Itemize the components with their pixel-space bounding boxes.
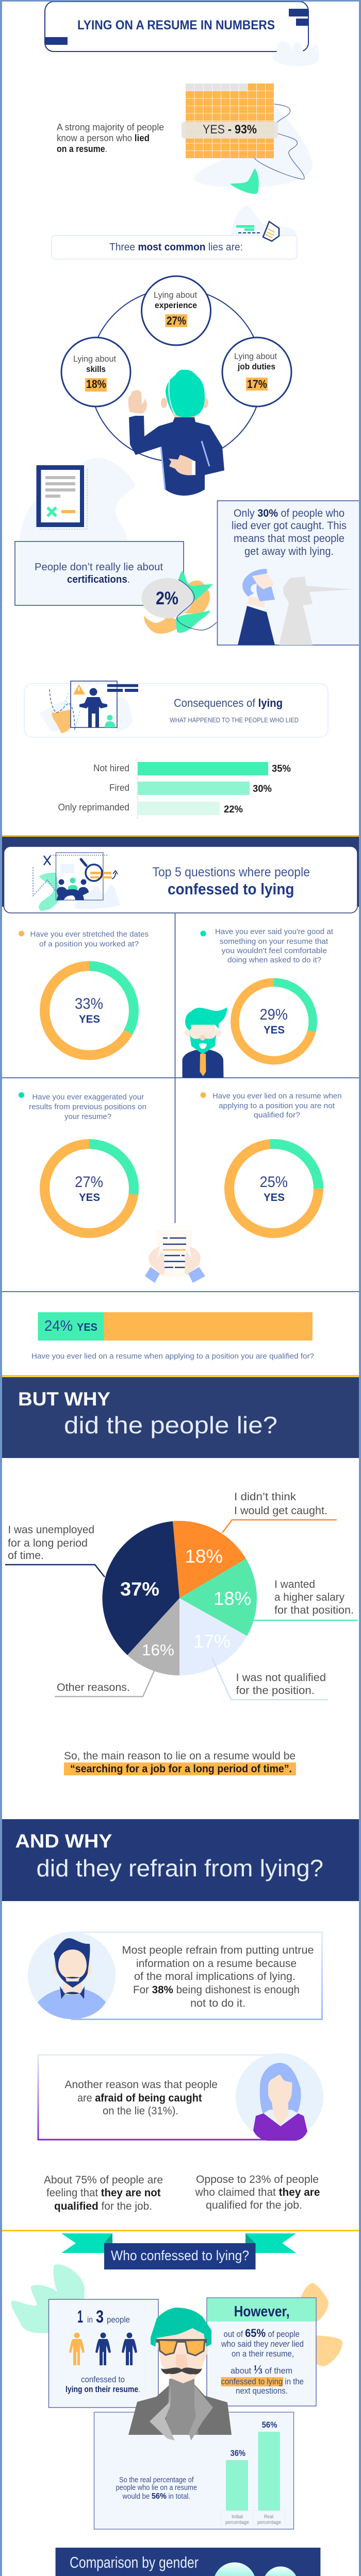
donut chart: 33 percent: 33% — [75, 995, 103, 1012]
panel: question 3 — [19, 1092, 146, 1233]
decorative blobs — [11, 2264, 342, 2366]
card: consequences of lying: Consequences of lying — [174, 697, 283, 709]
panel: question 1 — [19, 930, 149, 1055]
panel: real percentage: would be 56% in total. — [122, 2492, 190, 2501]
circle: skills: Lying about — [73, 354, 116, 364]
panel: afraid of being caught: are afraid of being caught — [77, 2092, 202, 2104]
panel: however — [207, 2298, 316, 2406]
section band: top 5 questions: confessed to lying — [168, 880, 294, 898]
pie chart: reasons to lie: 18% — [185, 1546, 223, 1567]
bar: only reprimanded: 22% — [224, 804, 243, 815]
panel: question 3: Have you ever exaggerated your — [32, 1093, 144, 1101]
panel: question 4: Have you ever lied on a resume when — [212, 1092, 341, 1100]
circle: job duties: 17% — [247, 378, 267, 391]
waffle chart: 93 percent yes: YES - 93% — [203, 123, 257, 137]
title: LYING ON A RESUME IN NUMBERS — [77, 18, 275, 32]
donut chart: 27 percent: YES — [79, 1192, 100, 1204]
icon: person navy — [122, 2333, 137, 2365]
illustration: man crossing fingers behind back — [128, 369, 224, 496]
panel: question 4: applying to a position you are not — [219, 1101, 335, 1110]
panel: real percentage: people who lie on a resume — [116, 2484, 197, 2492]
pie chart: reasons to lie: 17% — [193, 1631, 231, 1652]
section band: but why did the people lie — [2, 1375, 359, 1458]
section band: and why did they refrain: AND WHY — [15, 1831, 112, 1852]
text: not qualified 75 percent — [44, 2174, 163, 2212]
donut chart: 25 percent: YES — [264, 1192, 285, 1204]
grid dividers — [2, 913, 359, 1292]
label: didn't think I would get caught: I would get caught. — [234, 1505, 327, 1517]
panel: however: on a their resume, — [232, 2349, 294, 2359]
pie chart: reasons to lie — [5, 1491, 358, 1700]
donut chart: 27 percent: 27% — [75, 1174, 103, 1191]
panel: question 1: of a position you worked at? — [39, 940, 139, 948]
panel: question 2: you wouldn't feel comfortable — [222, 946, 327, 955]
bar: not hired: Not hired — [93, 763, 129, 773]
donut chart: 25 percent — [229, 1144, 319, 1233]
circle: experience: experience — [155, 300, 197, 310]
text: qualified 23 percent: qualified for the job. — [206, 2199, 302, 2211]
panel: however: confessed to lying in the — [221, 2377, 304, 2386]
illustration: consequences — [39, 681, 138, 733]
bar: fired: 30% — [253, 784, 272, 794]
panel: 1 in 3 people: confessed to — [81, 2375, 125, 2384]
circle: job duties: job duties — [237, 362, 275, 371]
pie chart: reasons to lie: 16% — [142, 1641, 174, 1659]
icon: person orange — [69, 2333, 85, 2365]
panel: question 4: qualified for? — [254, 1111, 300, 1120]
label: didn't think I would get caught: I didn’t think — [234, 1491, 297, 1503]
text: qualified 23 percent — [195, 2174, 320, 2211]
panel: 1 in 3 people: 1 — [77, 2307, 83, 2327]
avatar: woman — [236, 2053, 323, 2141]
icon: hands holding resume — [145, 1230, 205, 1283]
circle: experience: Lying about — [154, 290, 197, 300]
label: other reasons — [55, 1671, 154, 1697]
donut chart: 25 percent: 25% — [260, 1174, 288, 1191]
text: not qualified 75 percent: qualified for the job. — [54, 2200, 152, 2212]
illustration: man and long-nosed shadow — [238, 569, 353, 645]
circle: job duties — [222, 337, 291, 406]
panel: gender: Comparison by gender — [70, 2553, 199, 2571]
panel: 1 in 3 people: in — [87, 2315, 93, 2325]
panel: question 2 — [183, 927, 334, 1078]
panel: moral implications: not to do it. — [190, 1997, 245, 2009]
donut chart: 29 percent — [235, 982, 313, 1060]
donut chart: 29 percent: 29% — [260, 1006, 288, 1023]
circle: skills — [61, 337, 130, 406]
text: strong majority: A strong majority of people — [57, 122, 164, 132]
panel: moral implications: Most people refrain from putting untrue — [122, 1944, 314, 1956]
label: higher salary: for that position. — [274, 1604, 354, 1616]
donut chart: 27 percent — [44, 1144, 134, 1233]
text: main reason: So, the main reason to lie on a resume would be — [64, 1750, 296, 1762]
circle: job duties: Lying about — [234, 351, 277, 361]
bar: fired — [109, 782, 272, 795]
panel: moral implications — [28, 1932, 322, 2020]
section band: but why did the people lie: BUT WHY — [18, 1388, 110, 1410]
card: three most common lies: Three most common lies are: — [109, 242, 243, 253]
bar: not hired: 35% — [272, 764, 291, 774]
bar chart: initial vs real: percentage — [257, 2519, 281, 2526]
donut chart: 29 percent: YES — [264, 1024, 285, 1036]
panel: comparison by gender and age — [56, 2548, 320, 2576]
panel: question 3: your resume? — [64, 1112, 111, 1121]
label: unemployed — [5, 1524, 105, 1577]
panel: moral implications: of the moral implications of lying. — [134, 1971, 296, 1982]
bar chart: initial vs real: 36% — [230, 2448, 245, 2458]
panel: 1 in 3 people: people — [107, 2315, 130, 2325]
panel: only 30 percent got caught: means that most people — [234, 533, 344, 545]
label: not qualified — [212, 1657, 328, 1700]
panel: certifications — [15, 541, 217, 634]
bar chart: initial vs real: 56% — [262, 2420, 277, 2430]
panel: question 3: results from previous positions on — [29, 1103, 146, 1111]
badge: 2 percent — [141, 571, 217, 634]
progress bar: 24 percent yes: Have you ever lied on a resume when applying to a position you are qualified for? — [31, 1352, 314, 1361]
circle: skills: skills — [86, 364, 106, 374]
label: higher salary — [241, 1579, 358, 1620]
label: higher salary: a higher salary — [274, 1591, 344, 1603]
label: didn't think I would get caught — [222, 1491, 337, 1533]
panel: real percentage: So the real percentage of — [119, 2476, 194, 2484]
diagram: three most common lies circles — [61, 276, 291, 462]
label: unemployed: for a long period — [8, 1537, 88, 1549]
panel: however: about ⅓ of them — [231, 2363, 292, 2377]
panel: certifications: certifications. — [67, 573, 130, 585]
section band: top 5 questions: Top 5 questions where people — [153, 865, 310, 879]
card: consequences of lying: WHAT HAPPENED TO THE PEOPLE WHO LIED — [170, 717, 299, 724]
bar chart: initial vs real: Real — [264, 2514, 273, 2520]
illustration: certificate document — [20, 458, 135, 542]
panel: only 30 percent got caught: lied ever got caught. This — [232, 520, 347, 532]
text: qualified 23 percent: who claimed that they are — [195, 2187, 320, 2198]
panel: however: who said they never lied — [221, 2340, 304, 2349]
circle: skills: 18% — [86, 378, 106, 391]
icon: person navy — [95, 2333, 111, 2365]
panel: afraid of being caught: Another reason was that people — [65, 2079, 218, 2091]
panel: however: next questions. — [236, 2386, 288, 2396]
title box — [45, 2, 319, 66]
panel: question 1: Have you ever stretched the dates — [30, 930, 149, 939]
panel: only 30 percent got caught: get away with lying. — [244, 546, 334, 557]
ribbon heading: who confessed: Who confessed to lying? — [111, 2248, 249, 2263]
label: not qualified: I was not qualified — [236, 1672, 326, 1684]
ribbon heading: who confessed — [61, 2233, 296, 2269]
bar: only reprimanded: Only reprimanded — [58, 802, 129, 812]
panel: however: out of 65% of people — [224, 2327, 300, 2340]
text: main reason: “searching for a job for a long period of time”. — [70, 1763, 292, 1775]
bubble: 41 percent women — [263, 2567, 298, 2576]
text: main reason — [64, 1750, 296, 1775]
bar: not hired — [93, 762, 291, 775]
bubble: 58 percent men — [214, 2563, 256, 2576]
label: higher salary: I wanted — [274, 1579, 315, 1590]
bar chart: initial vs real — [221, 2420, 285, 2529]
panel: 1 in 3 people — [48, 2299, 158, 2408]
bar: fired: Fired — [109, 783, 129, 793]
panel: 1 in 3 people: 3 — [96, 2307, 104, 2327]
panel: moral implications: For 38% being dishonest is enough — [133, 1984, 300, 1996]
illustration: hipster man with sunglasses — [128, 2308, 232, 2441]
text: strong majority: on a resume. — [57, 143, 107, 154]
badge: 2 percent: 2% — [156, 588, 178, 608]
text: qualified 23 percent: Oppose to 23% of people — [196, 2174, 319, 2185]
pie chart: reasons to lie: 37% — [120, 1579, 159, 1600]
panel: certifications: People don’t really lie about — [35, 561, 163, 573]
bar chart: initial vs real: percentage — [225, 2519, 249, 2526]
bar chart: consequences — [58, 758, 291, 818]
progress bar: 24 percent yes: 24% — [44, 1318, 73, 1334]
illustration: bearded man with tie — [183, 1007, 227, 1078]
panel: moral implications: information on a resume because — [136, 1958, 297, 1970]
section band: but why did the people lie: did the people lie? — [64, 1412, 277, 1438]
label: other reasons: Other reasons. — [57, 1682, 130, 1693]
progress bar: 24 percent yes: YES — [77, 1321, 97, 1333]
donut chart: 33 percent — [44, 966, 134, 1055]
avatar: bearded man — [28, 1932, 116, 2020]
panel: question 4 — [200, 1092, 341, 1233]
section band: top 5 questions — [2, 835, 359, 913]
circle: experience — [141, 276, 210, 345]
section band: and why did they refrain: did they refrain from lying? — [36, 1855, 323, 1882]
text: strong majority — [57, 122, 164, 154]
bar: only reprimanded — [58, 802, 243, 815]
pie chart: reasons to lie: 18% — [214, 1588, 251, 1609]
card: three most common lies — [52, 206, 297, 259]
waffle chart: 93 percent yes — [182, 83, 313, 194]
panel: gender — [56, 2548, 320, 2576]
panel: afraid of being caught — [38, 2053, 323, 2141]
panel: only 30 percent got caught: Only 30% of people who — [234, 507, 344, 519]
panel: however: However, — [234, 2303, 290, 2320]
text: strong majority: know a person who lied — [57, 132, 150, 143]
card: consequences of lying — [24, 681, 328, 737]
panel: question 2: doing when asked to do it? — [227, 956, 321, 964]
circle: experience: 27% — [167, 314, 186, 327]
illustration: interview and magnifier — [33, 853, 120, 911]
panel: real percentage — [94, 2412, 294, 2529]
panel: question 2: something on your resume that — [220, 937, 329, 946]
panel: 1 in 3 people: lying on their resume. — [65, 2385, 140, 2394]
donut chart: 33 percent: YES — [79, 1013, 100, 1025]
panel: question 2: Have you ever said you're good at — [215, 927, 334, 936]
panel: only 30 percent got caught — [218, 501, 359, 645]
text: not qualified 75 percent: feeling that they are not — [46, 2187, 161, 2199]
bar chart: initial vs real: Initial — [232, 2514, 243, 2520]
section band: and why did they refrain — [2, 1819, 359, 1901]
text: not qualified 75 percent: About 75% of people are — [44, 2174, 163, 2186]
label: unemployed: I was unemployed — [8, 1524, 94, 1536]
label: unemployed: of time. — [8, 1550, 44, 1562]
label: not qualified: for the position. — [236, 1685, 315, 1697]
progress bar: 24 percent yes — [31, 1312, 314, 1361]
panel: afraid of being caught: on the lie (31%). — [103, 2105, 178, 2117]
